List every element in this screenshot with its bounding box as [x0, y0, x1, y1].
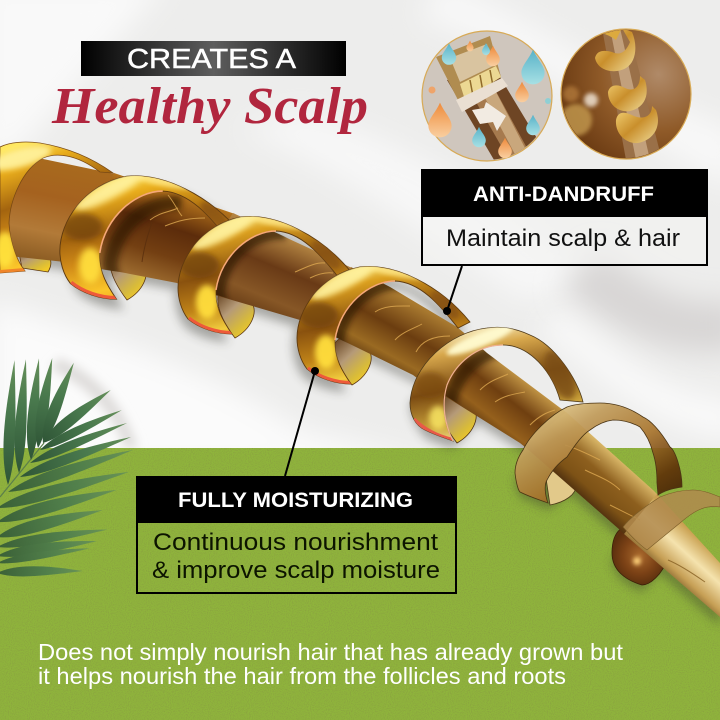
callout: fully moisturizing: FULLY MOISTURIZING	[178, 489, 413, 512]
callout: anti-dandruff	[421, 169, 708, 265]
footer text: Does not simply nourish hair that has already grown but	[38, 639, 624, 665]
callout: fully moisturizing: & improve scalp moisture	[152, 557, 440, 584]
title banner: CREATES A	[127, 43, 296, 74]
footer text: it helps nourish the hair from the follicles and roots	[38, 663, 566, 689]
callout: fully moisturizing: Continuous nourishment	[153, 529, 438, 556]
satin background	[0, 0, 720, 470]
footer text	[38, 639, 624, 689]
palm leaf	[0, 357, 135, 577]
gold ribbon band 4	[297, 255, 470, 384]
translucent ribbon band 7	[623, 490, 720, 550]
inset circle: droplets around hair	[420, 30, 554, 165]
callout connector: anti-dandruff	[443, 266, 462, 315]
callout: anti-dandruff: ANTI-DANDRUFF	[473, 183, 654, 206]
gold ribbon band 2	[60, 164, 241, 299]
green ground	[0, 448, 720, 720]
gold ribbon band 3	[178, 205, 351, 334]
hair and ribbon shadow	[0, 186, 720, 626]
hair shaft	[0, 150, 720, 617]
hair cuticle lines	[142, 195, 705, 582]
back cups of the ribbons	[18, 248, 668, 585]
translucent ribbon band 6	[515, 403, 682, 503]
title banner	[81, 41, 346, 76]
gold ribbon band 5	[410, 320, 583, 441]
inset circle: gold spiral hair	[560, 28, 691, 160]
callout: anti-dandruff: Maintain scalp & hair	[446, 225, 680, 252]
icon: water drops	[428, 41, 551, 158]
callout connector: fully moisturizing	[285, 367, 319, 476]
title: Healthy Scalp: Healthy Scalp	[51, 78, 368, 135]
gold ribbon band 1	[0, 141, 113, 273]
callout: fully moisturizing	[136, 476, 457, 593]
band contact shadows on hair	[100, 192, 498, 404]
